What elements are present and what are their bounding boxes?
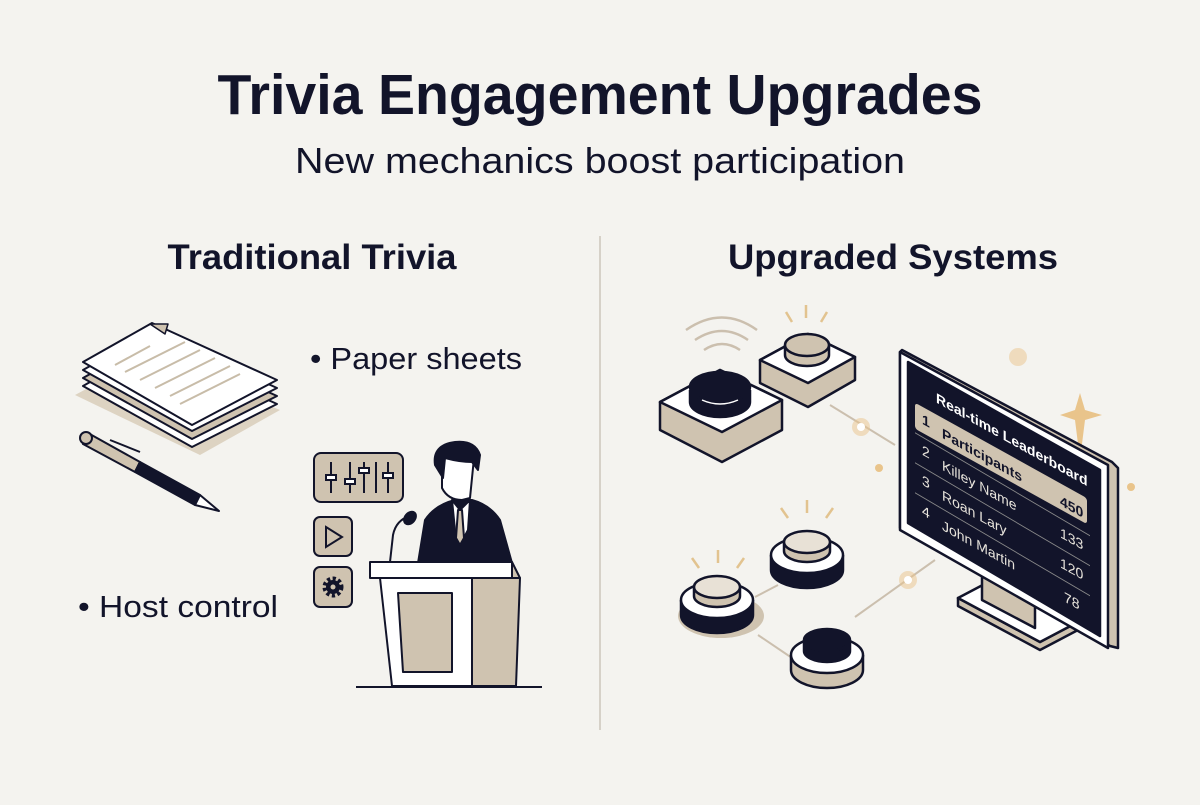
connector lines xyxy=(755,405,935,660)
wifi arcs xyxy=(686,318,757,350)
text: host control: • Host control xyxy=(78,589,278,624)
illustration: host at podium xyxy=(356,442,542,687)
heading: traditional trivia: Traditional Trivia xyxy=(168,238,457,277)
monitor with leaderboard: 133 xyxy=(1060,525,1083,554)
icon: play xyxy=(314,517,352,556)
buzzer: large dark xyxy=(660,370,782,462)
monitor with leaderboard: 450 xyxy=(1060,493,1083,522)
subtitle: New mechanics boost participation xyxy=(295,140,905,181)
monitor with leaderboard: Roan Lary xyxy=(942,488,1007,539)
monitor with leaderboard xyxy=(900,350,1118,650)
buzzer: round light 1 xyxy=(678,576,764,638)
buzzer: small beige xyxy=(760,334,855,407)
monitor with leaderboard: 78 xyxy=(1064,589,1080,614)
title: Trivia Engagement Upgrades xyxy=(218,63,982,127)
text: paper sheets: • Paper sheets xyxy=(310,341,522,376)
icon: paper stack xyxy=(75,323,280,455)
icon: sliders xyxy=(314,453,403,502)
monitor with leaderboard: 2 xyxy=(922,443,930,463)
monitor with leaderboard: Real-time Leaderboard xyxy=(936,390,1087,490)
monitor with leaderboard: 120 xyxy=(1060,555,1083,584)
monitor with leaderboard: 4 xyxy=(922,503,930,523)
buzzer: round dark xyxy=(791,629,863,688)
monitor with leaderboard: Participants xyxy=(942,426,1022,486)
monitor with leaderboard: 3 xyxy=(922,473,930,493)
buzzer: round light 2 xyxy=(771,531,843,588)
icon: pen xyxy=(80,432,219,511)
glow dots xyxy=(852,348,1135,589)
heading: upgraded systems: Upgraded Systems xyxy=(728,238,1058,277)
monitor with leaderboard: 1 xyxy=(922,412,930,432)
monitor with leaderboard: John Martin xyxy=(942,518,1015,574)
icon: gear xyxy=(314,567,352,607)
monitor with leaderboard: Killey Name xyxy=(942,458,1017,515)
